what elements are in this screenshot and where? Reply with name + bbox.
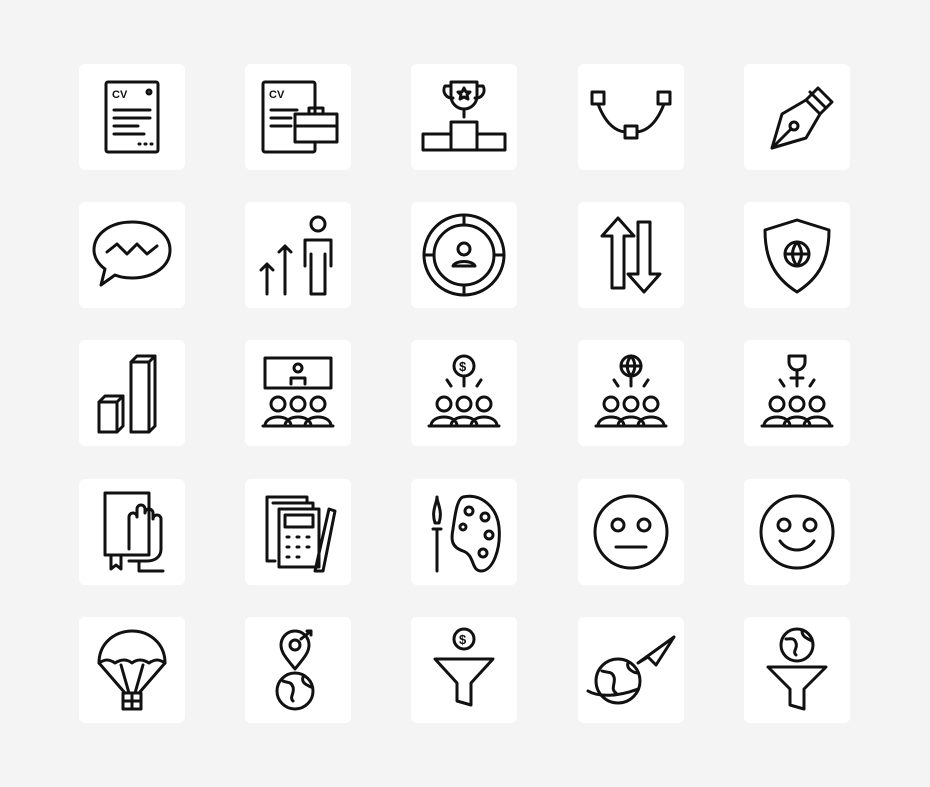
icon: paper plane globe (578, 617, 684, 723)
icon: dollar group: $ (459, 359, 467, 374)
icon: neutral face (578, 479, 684, 585)
icon: oath hand book (79, 479, 185, 585)
icon: cv with briefcase: CV (269, 89, 285, 101)
icon: globe shield (744, 202, 850, 308)
icon: globe group (578, 340, 684, 446)
icon: career growth person (245, 202, 351, 308)
icon: parachute (79, 617, 185, 723)
icon: cv document: CV (112, 89, 128, 101)
icon: cv with briefcase (245, 64, 351, 170)
icon: 3d bar chart (79, 340, 185, 446)
icon: presentation audience (245, 340, 351, 446)
icon: bezier curve (578, 64, 684, 170)
icon: dollar funnel: $ (459, 632, 467, 647)
icon: dollar group (411, 340, 517, 446)
icon: location globe (245, 617, 351, 723)
icon: transfer arrows (578, 202, 684, 308)
icon: cv document (79, 64, 185, 170)
icon: globe funnel (744, 617, 850, 723)
icon: trophy podium (411, 64, 517, 170)
icon: calculator papers (245, 479, 351, 585)
icon: speech bubble chart (79, 202, 185, 308)
icon: paint palette (411, 479, 517, 585)
icon: smiling face (744, 479, 850, 585)
icon: dollar funnel (411, 617, 517, 723)
icon: pen nib (744, 64, 850, 170)
icon: trophy group (744, 340, 850, 446)
icon: target person (411, 202, 517, 308)
